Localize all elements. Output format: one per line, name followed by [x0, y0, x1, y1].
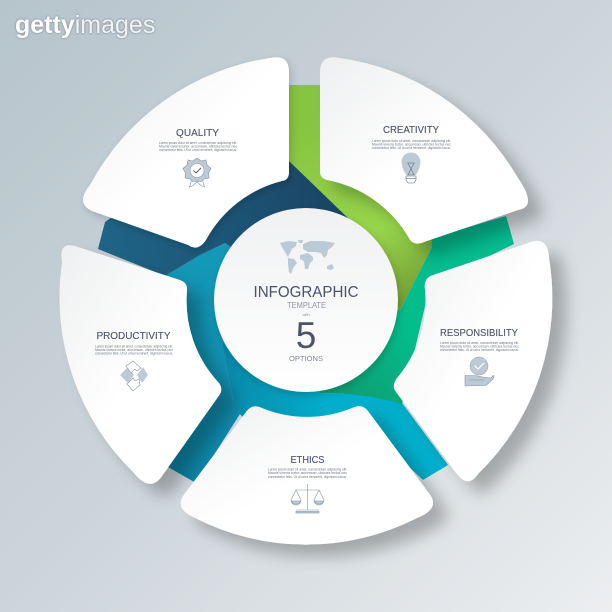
text block: ethics: consectetur felis. Ut ut urna hendrerit, dignissim lacus. — [268, 475, 347, 479]
text block: responsibility — [440, 341, 519, 352]
label: template: TEMPLATE — [287, 301, 326, 310]
logo: gettyimages: gettyimages — [15, 11, 155, 39]
text block: productivity: Mauris viverra tortor, accumsan, ultricies lectus nec — [95, 348, 173, 352]
panel shape: responsibility — [394, 241, 552, 481]
panel: creativity — [320, 57, 528, 244]
ribbon: left blue — [165, 243, 306, 483]
text block: creativity — [372, 139, 451, 150]
icon: hand holding check — [465, 357, 494, 386]
heading: quality: QUALITY — [176, 127, 219, 139]
panel: productivity — [59, 245, 221, 484]
ribbon: top green — [289, 85, 432, 310]
icon: puzzle pieces — [120, 361, 148, 391]
disc — [214, 208, 398, 392]
text block: creativity: Lorem ipsum dolor sit amet, consectetuer adipiscing elit. — [372, 139, 451, 143]
panel shape: quality — [83, 57, 289, 248]
icon: light bulb with hourglass — [402, 152, 421, 183]
ribbon: bottom cyan — [222, 300, 448, 480]
title: infographic: INFOGRAPHIC — [254, 284, 358, 301]
heading: creativity: CREATIVITY — [383, 124, 439, 136]
text block: quality: Lorem ipsum dolor sit amet, consectetuer adipiscing elit. — [159, 141, 237, 145]
panel: responsibility — [394, 241, 552, 481]
text block: quality: Mauris viverra tortor, accumsan, ultricies lectus nec — [159, 144, 237, 148]
icon: scales — [291, 484, 324, 513]
text block: creativity: consectetur felis. Ut ut urna hendrerit, dignissim lacus. — [372, 146, 451, 150]
ribbon: top-left navy — [98, 161, 356, 300]
text block: productivity — [95, 344, 173, 356]
heading: productivity: PRODUCTIVITY — [96, 330, 170, 342]
text block: ethics: Mauris viverra tortor, accumsan, ultricies lectus nec — [268, 471, 347, 475]
text block: ethics — [268, 468, 347, 479]
text block: quality: consectetur felis. Ut ut urna hendrerit, dignissim lacus. — [159, 148, 237, 152]
label: options: OPTIONS — [289, 354, 323, 363]
text block: responsibility: consectetur felis. Ut ut urna hendrerit, dignissim lacus. — [440, 348, 519, 352]
text block: responsibility: Lorem ipsum dolor sit amet, consectetuer adipiscing elit. — [440, 341, 519, 345]
panel shape: productivity — [59, 245, 221, 484]
heading: ethics: ETHICS — [290, 454, 324, 466]
label: with: with — [302, 312, 310, 317]
text block: responsibility: Mauris viverra tortor, accumsan, ultricies lectus nec — [440, 344, 519, 348]
panel: ethics — [181, 406, 433, 545]
text block: creativity: Mauris viverra tortor, accumsan, ultricies lectus nec — [372, 142, 451, 146]
text block: productivity: consectetur felis. Ut ut urna hendrerit, dignissim lacus. — [95, 352, 173, 356]
centre circle — [214, 208, 398, 392]
panel: quality — [83, 57, 289, 248]
ribbon ring — [98, 85, 514, 483]
text block: ethics: Lorem ipsum dolor sit amet, consectetuer adipiscing elit. — [268, 468, 347, 472]
text block: productivity: Lorem ipsum dolor sit amet, consectetuer adipiscing elit. — [95, 344, 173, 348]
icon: award badge — [183, 158, 211, 187]
heading: responsibility: RESPONSIBILITY — [440, 327, 518, 339]
ribbon: right teal — [306, 216, 514, 404]
icon: world map — [280, 240, 335, 274]
text block: quality — [159, 141, 237, 152]
number: 5: 5 — [296, 315, 316, 356]
panel shape: ethics — [181, 406, 433, 545]
panel shape: creativity — [320, 57, 528, 244]
